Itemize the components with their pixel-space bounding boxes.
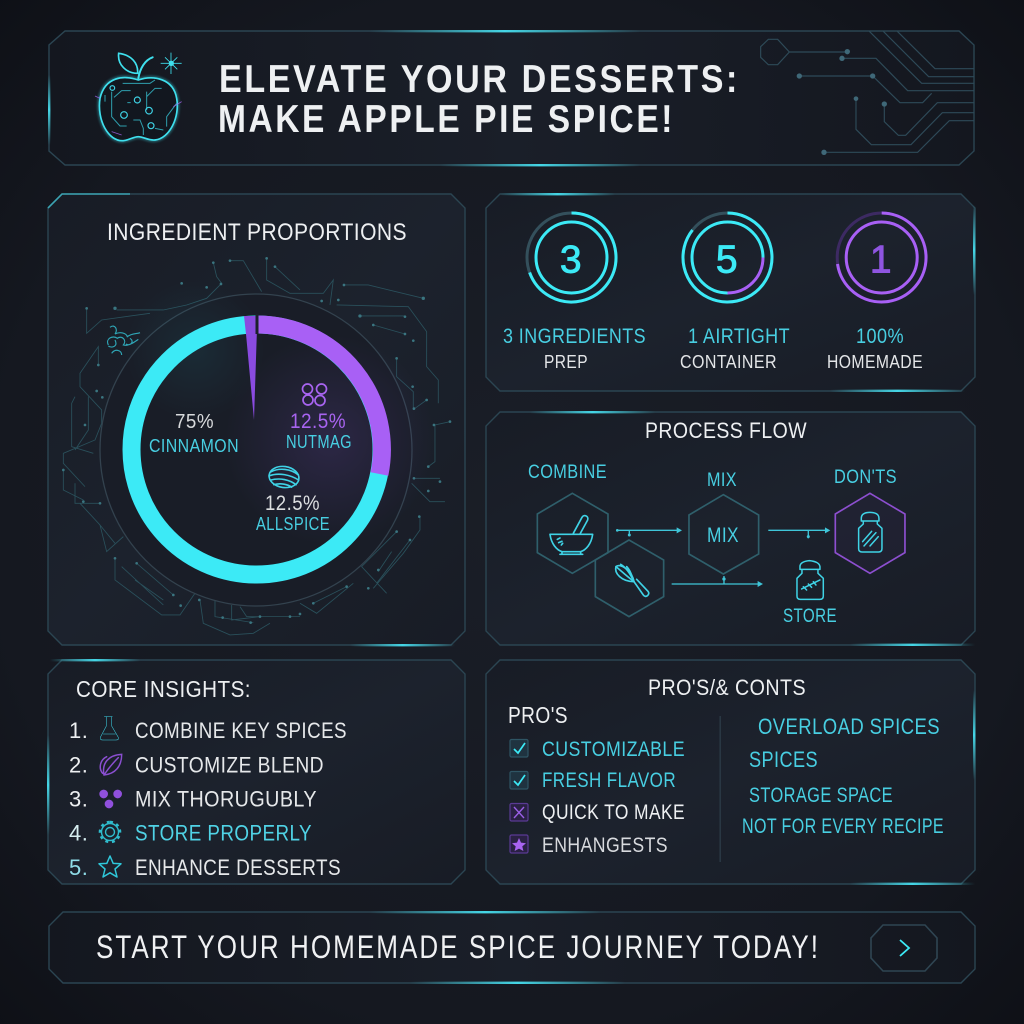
heading: INGREDIENT PROPORTIONS [107,219,407,246]
title [218,58,740,141]
item 1 [69,717,347,743]
stat: 1 airtight container [680,213,790,372]
step: mix: MIX [707,524,739,547]
pro: customizable: CUSTOMIZABLE [542,738,685,761]
step: don'ts shaker [834,466,905,573]
arrow button [871,925,937,971]
arrow: combine to mix [616,527,682,536]
label: cinnamon: CINNAMON [149,435,239,456]
item 4 [69,821,312,846]
label: cinnamon: 75% [175,411,214,433]
step: store jar [783,561,837,627]
panel: ingredient proportions [48,194,465,646]
donut chart [132,314,382,574]
step: mix: MIX [707,469,737,491]
panel: call to action [49,911,975,984]
pros column: PRO'S [508,702,568,728]
pros column [508,702,685,857]
inner glow [225,335,435,545]
heading: PRO'S/& CONTS [648,675,806,700]
item 4: STORE PROPERLY [135,821,312,846]
call to action text: START YOUR HOMEMADE SPICE JOURNEY TODAY! [96,929,820,965]
stat: 1 airtight container: 1 AIRTIGHT [688,325,790,348]
label: allspice: 12.5% [265,492,320,515]
cons column [742,714,944,838]
pro: enhancests: ENHANGESTS [542,834,668,857]
panel: process flow [486,411,975,646]
pro: fresh flavor: FRESH FLAVOR [542,769,676,792]
stat: 100% homemade: 100% [856,325,904,348]
stat: 100% homemade: 1 [870,238,892,282]
item 3: 3. [69,787,88,812]
step: don'ts shaker: DON'TS [834,466,897,488]
circuit traces [62,257,451,635]
stat: 3 ingredients [503,213,646,372]
stat: 3 ingredients: 3 INGREDIENTS [503,325,646,348]
panel: core insights [47,659,465,884]
step: combine [528,461,608,573]
item 2 [69,753,324,778]
pro: enhancests [510,834,668,857]
item 1: 1. [69,718,88,743]
pro: fresh flavor [510,769,676,792]
panel: pros and cons [486,660,975,885]
title: ELEVATE YOUR DESSERTS: [219,58,740,101]
label: nutmeg [286,384,352,452]
cons column: OVERLOAD SPICES [758,714,940,739]
item 1: COMBINE KEY SPICES [135,718,347,743]
heading: CORE INSIGHTS: [76,676,251,702]
item 4: 4. [69,821,88,846]
label: nutmeg: 12.5% [290,410,346,433]
cons column: SPICES [749,747,818,772]
cons column: NOT FOR EVERY RECIPE [742,815,944,838]
item 5: ENHANCE DESSERTS [135,855,341,880]
label: allspice [256,465,330,534]
icon: circuit apple [95,53,182,141]
item 2: CUSTOMIZE BLEND [135,753,324,778]
arrow: whisk to store [672,576,763,587]
title: MAKE APPLE PIE SPICE! [218,98,675,141]
cons column: STORAGE SPACE [749,784,893,807]
stat: 3 ingredients: 3 [560,238,582,282]
item 3 [69,787,317,812]
label: nutmeg: NUTMAG [286,432,352,452]
stat: 1 airtight container: 5 [716,238,738,282]
outer dial ring [100,294,412,606]
step: combine: COMBINE [528,461,607,483]
step: whisk [595,540,664,617]
panel: key stats [486,193,975,392]
pro: quick to make [510,801,685,824]
stat: 3 ingredients: PREP [544,351,588,372]
circuit decoration [761,31,974,155]
pro: quick to make: QUICK TO MAKE [542,801,685,824]
icon: cinnamon doodle [108,326,140,355]
label: allspice: ALLSPICE [256,514,330,534]
step: mix [689,469,759,574]
item 5 [69,855,341,880]
stat: 100% homemade: HOMEMADE [827,351,923,372]
item 2: 2. [69,753,88,778]
label: cinnamon [149,411,239,456]
stat: 100% homemade [827,213,926,372]
panel: header [48,30,974,166]
step: store jar: STORE [783,605,837,627]
arrow: mix to don'ts [768,527,830,538]
item 5: 5. [69,855,88,880]
item 3: MIX THORUGUBLY [135,787,317,812]
stat: 1 airtight container: CONTAINER [680,351,777,372]
heading: PROCESS FLOW [645,418,807,443]
